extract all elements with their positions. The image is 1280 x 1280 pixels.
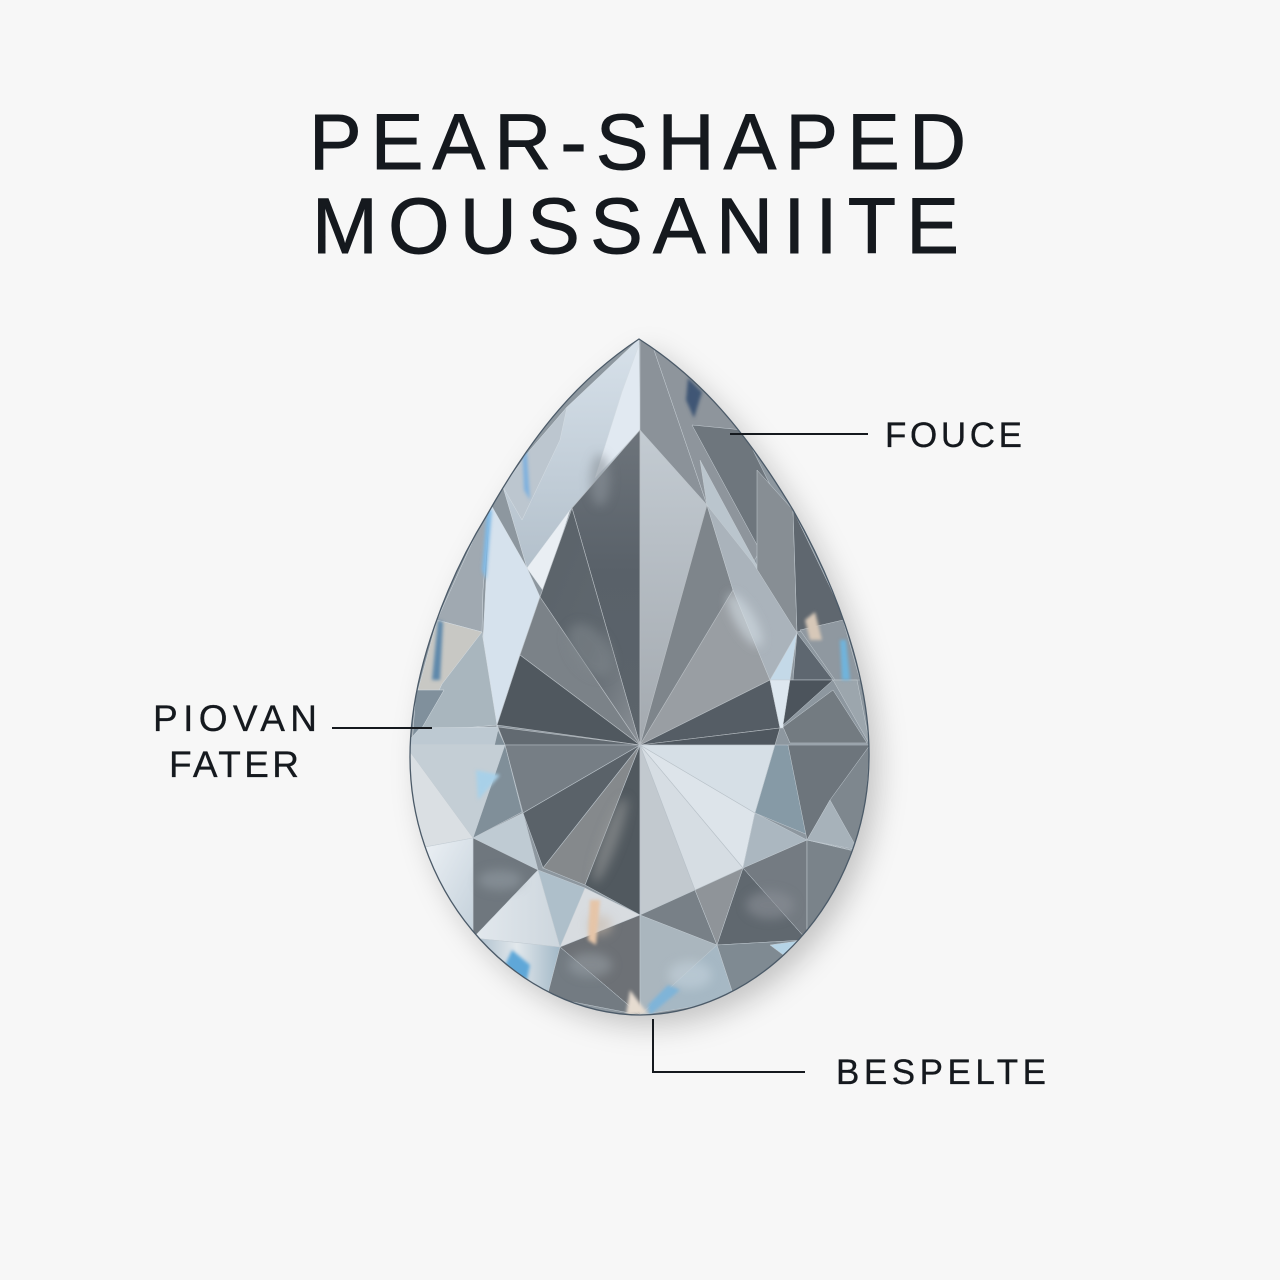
title: MOUSSANIITE xyxy=(312,181,959,270)
callout: Piovan Fater: PIOVAN xyxy=(153,698,317,739)
upper left crown facets xyxy=(405,339,640,745)
lower central facets xyxy=(505,745,775,915)
callout: Bespelte xyxy=(653,1019,1046,1092)
gem outline xyxy=(410,339,869,1015)
lower side facets xyxy=(405,730,870,1015)
upper central fan facets xyxy=(497,430,780,745)
soft internal reflections xyxy=(478,454,794,989)
upper right crown facets xyxy=(640,339,870,745)
coloured glints xyxy=(432,378,850,1015)
callout: Fouce: FOUCE xyxy=(885,416,1022,455)
callout: Bespelte: BESPELTE xyxy=(836,1053,1046,1092)
title: PEAR-SHAPED xyxy=(309,97,966,186)
pear-shaped gem xyxy=(400,330,880,1030)
callout: Piovan Fater xyxy=(153,698,432,785)
callout: Piovan Fater: FATER xyxy=(169,744,299,785)
title xyxy=(309,97,966,270)
gem drop shadow xyxy=(420,351,879,1027)
